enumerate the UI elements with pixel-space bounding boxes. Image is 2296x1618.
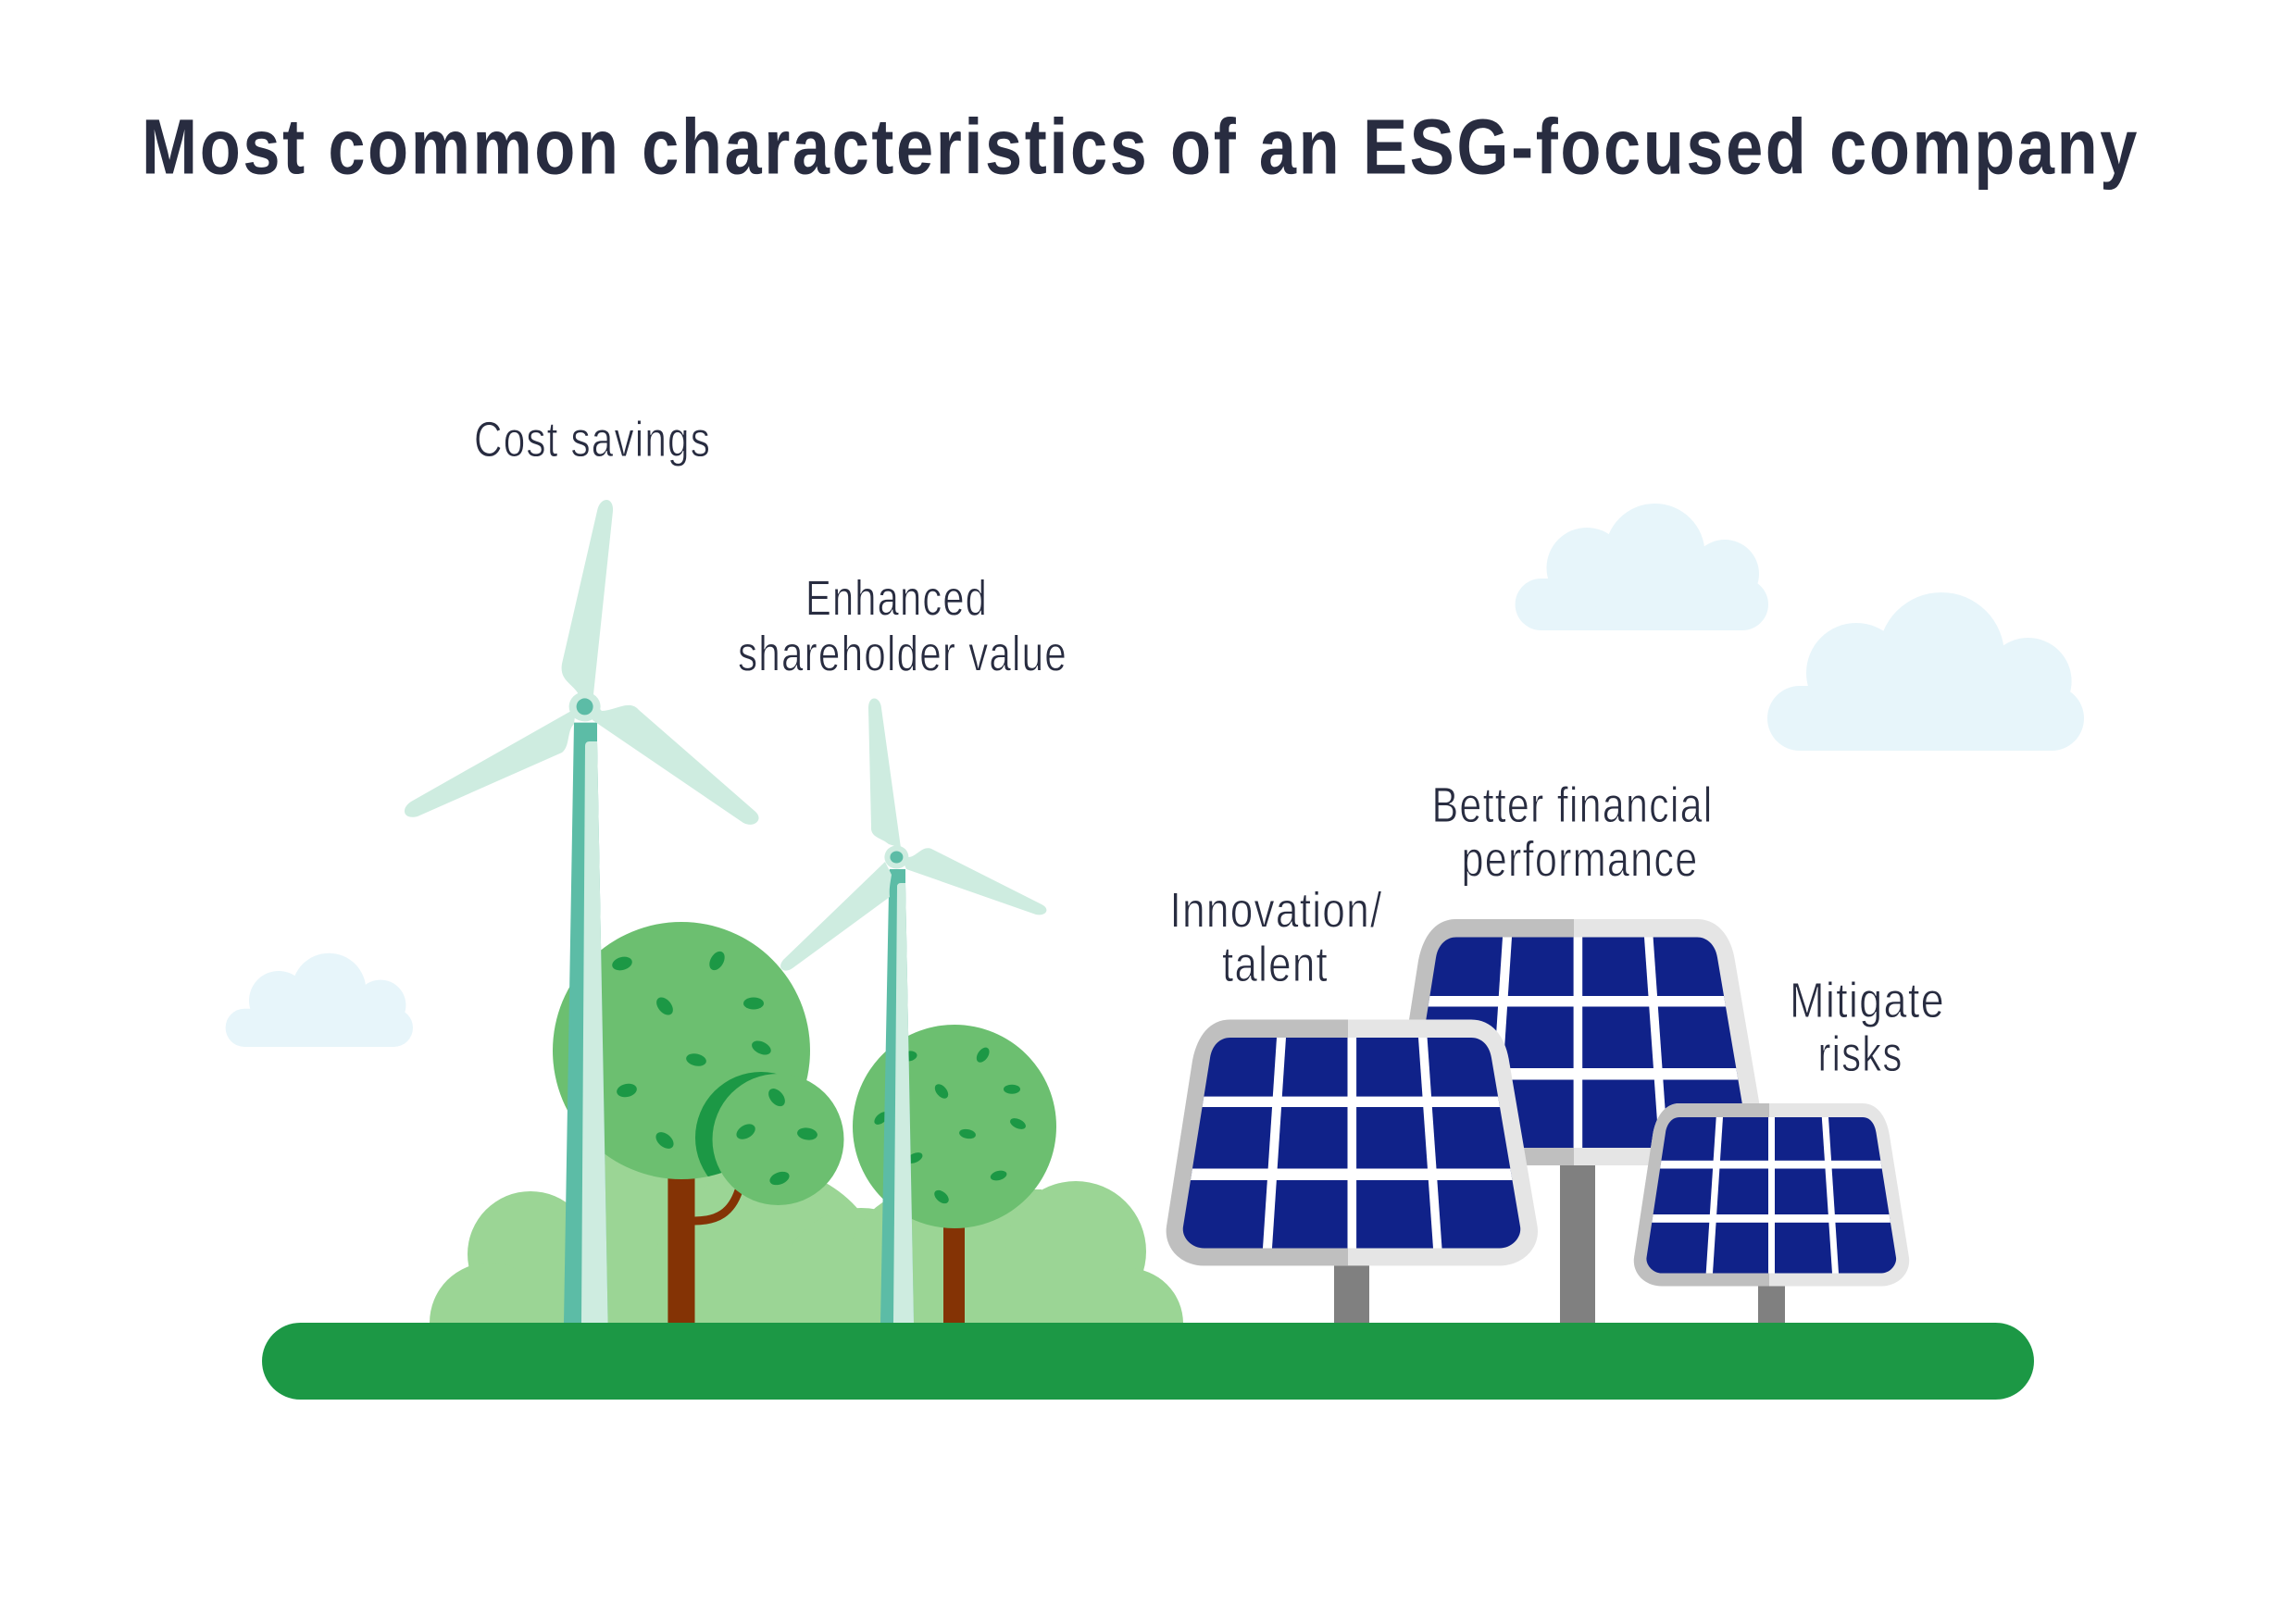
solar panel: small [1634,1103,1909,1328]
solar panel: front [1167,1020,1538,1328]
label: cost savings: Cost savings [474,412,711,467]
label: innovation talent: talent [1222,937,1329,992]
label: enhanced shareholder value [738,570,1067,681]
cloud: large right [1767,592,2084,751]
solar panel: back [1392,919,1764,1328]
bushes [430,1153,1183,1323]
cloud: left [226,953,413,1047]
label: mitigate risks [1790,973,1945,1082]
tree: large with side branch [553,922,844,1323]
label: innovation talent [1170,883,1383,992]
label: better financial performance [1431,778,1713,887]
label: better financial performance: performance [1461,831,1698,887]
label: mitigate risks: risks [1818,1027,1903,1082]
wind turbine: large [405,500,759,1323]
wind turbine: small [780,698,1046,1323]
label: enhanced shareholder value: shareholder value [738,626,1067,681]
tree: right [853,1025,1056,1323]
label: mitigate risks: Mitigate [1790,973,1945,1028]
label: innovation talent: Innovation/ [1170,883,1383,939]
label: enhanced shareholder value: Enhanced [805,570,988,626]
label: better financial performance: Better financial [1431,778,1713,833]
ground [262,1323,2034,1400]
cloud: upper small [1516,504,1768,630]
